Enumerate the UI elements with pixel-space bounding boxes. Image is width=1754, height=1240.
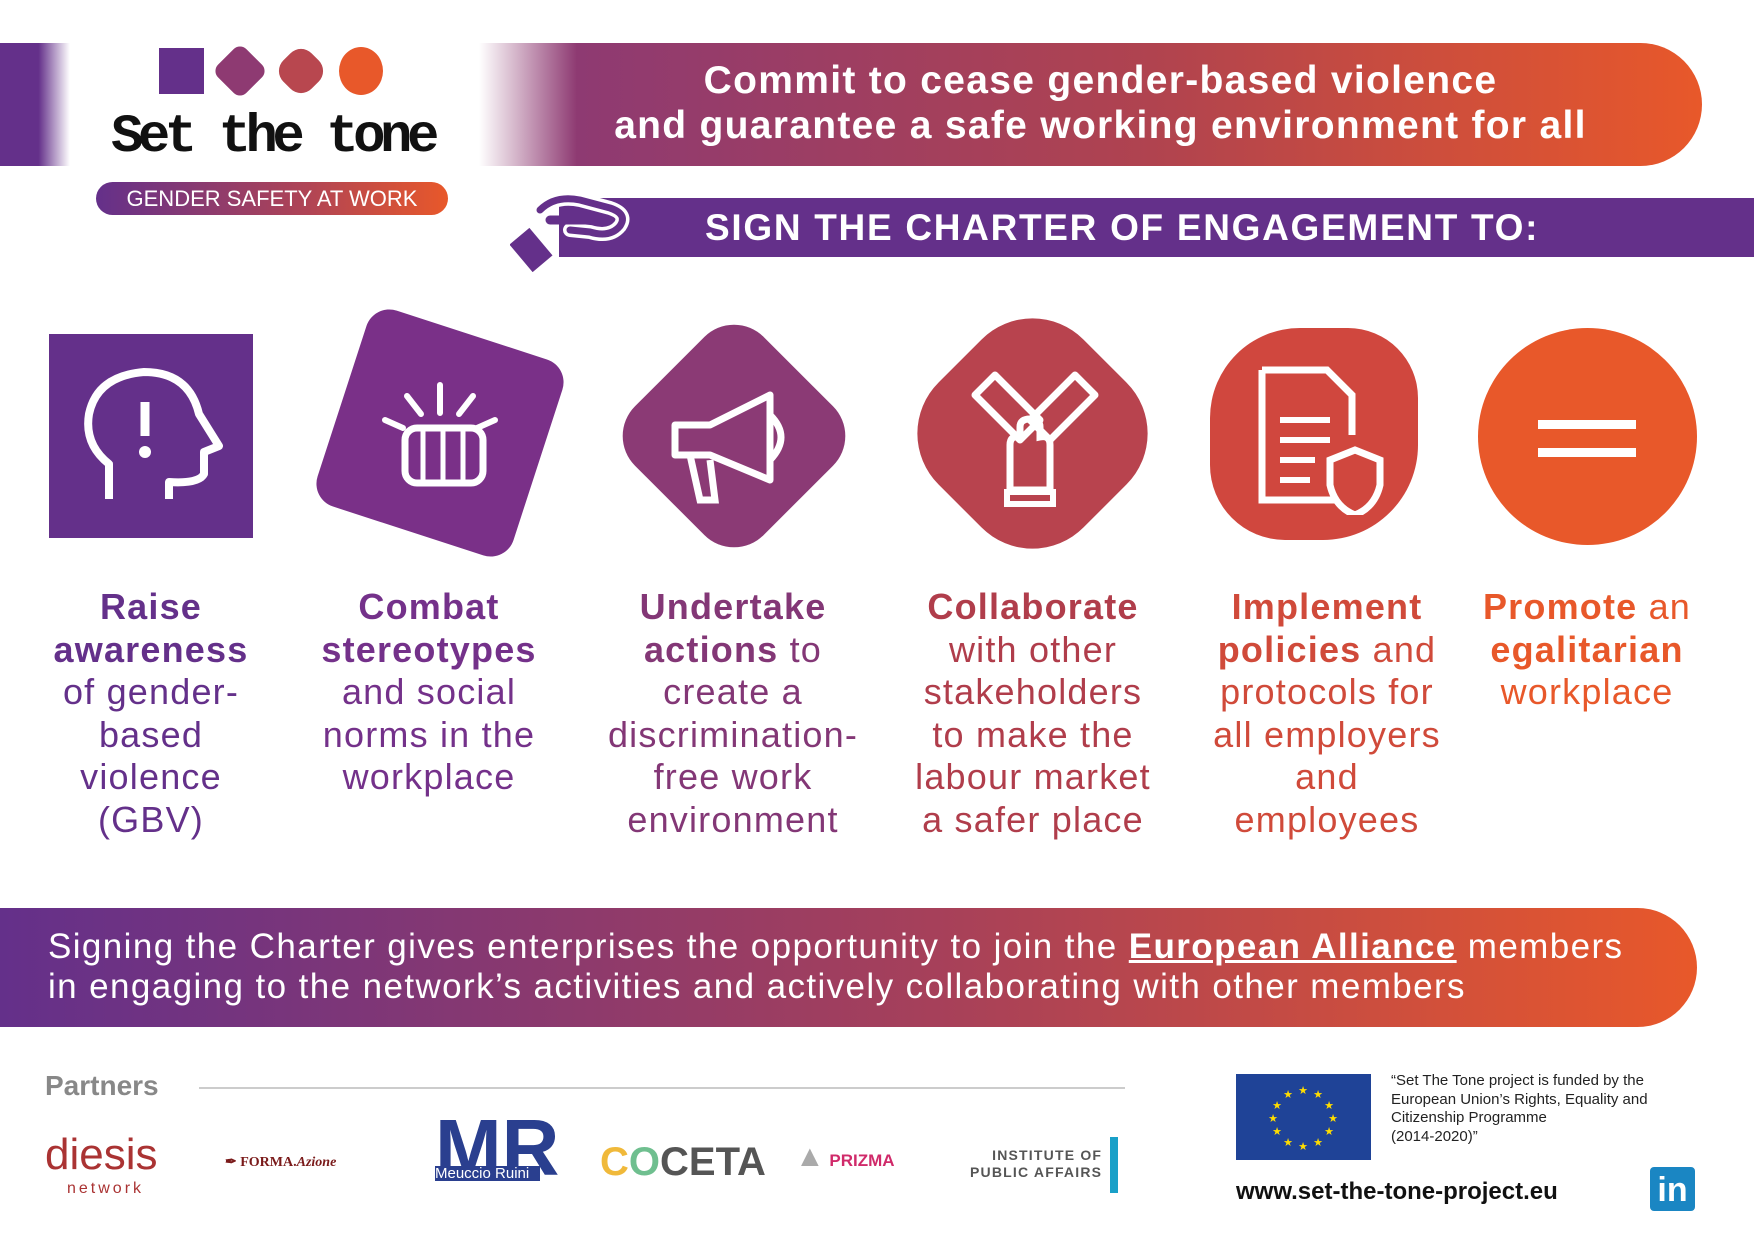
EU flag: ★ <box>1272 1126 1282 1138</box>
funding text: Citizenship Programme <box>1391 1109 1547 1126</box>
text: implement: all employers <box>1213 714 1441 754</box>
icon 4: hands <box>888 289 1177 578</box>
text: undertake actions: Undertake <box>640 586 826 627</box>
text: raise awareness: (GBV) <box>98 798 204 840</box>
EU flag: ★ <box>1328 1113 1338 1125</box>
top banner: and guarantee a safe working environment for all <box>614 104 1587 147</box>
text: collaborate: a safer place <box>922 798 1144 840</box>
EU flag: ★ <box>1268 1113 1278 1125</box>
funding text: (2014-2020)” <box>1391 1128 1478 1144</box>
text: combat stereotypes: workplace <box>343 756 515 797</box>
text: combat stereotypes: and social <box>342 671 516 712</box>
top banner <box>479 43 1702 166</box>
text: raise awareness: of gender- <box>63 671 239 712</box>
icon 6: equals <box>1478 328 1697 545</box>
bottom banner: in engaging to the network’s activities and actively collaborating with other members <box>48 967 1466 1006</box>
text: raise awareness: violence <box>80 756 222 797</box>
logo: coceta: COCETA <box>600 1140 766 1184</box>
text: implement: employees <box>1235 798 1419 840</box>
EU flag: ★ <box>1283 1137 1293 1149</box>
EU flag: ★ <box>1298 1085 1308 1097</box>
text: undertake actions <box>608 586 858 840</box>
funding text <box>1391 1072 1648 1144</box>
left purple bar <box>0 43 70 166</box>
EU flag: ★ <box>1272 1100 1282 1112</box>
EU flag: ★ <box>1283 1089 1293 1101</box>
text: collaborate: labour market <box>915 756 1151 797</box>
text: implement: Implement <box>1232 586 1422 627</box>
EU flag: ★ <box>1313 1089 1323 1101</box>
bottom banner: Signing the Charter gives enterprises the opportunity to join the European Alliance members <box>48 927 1623 966</box>
logo: prizma: ▲ PRIZMA <box>795 1140 895 1173</box>
icon: linkedin: in <box>1657 1171 1688 1209</box>
partner logos <box>45 1103 1118 1197</box>
bottom banner <box>0 908 1697 1027</box>
icon 5: document <box>1210 328 1418 540</box>
text: collaborate: stakeholders <box>924 671 1142 712</box>
text: collaborate: with other <box>949 628 1117 670</box>
EU flag: ★ <box>1298 1141 1308 1153</box>
icon: linkedin <box>1650 1167 1695 1211</box>
text: raise awareness: Raise <box>100 586 202 627</box>
EU flag: ★ <box>1324 1100 1334 1112</box>
text: implement: and <box>1295 756 1359 797</box>
text: promote: Promote an <box>1483 586 1691 627</box>
funding text: European Union’s Rights, Equality and <box>1391 1090 1648 1108</box>
text: implement <box>1213 586 1441 840</box>
logo: meuccio ruini: MR <box>435 1103 559 1192</box>
text: promote <box>1483 586 1691 712</box>
logo title: Set the tone <box>111 107 434 168</box>
logo shapes <box>159 46 383 96</box>
icon 1: head <box>49 334 253 538</box>
logo: institute of public affairs: INSTITUTE OF <box>992 1147 1102 1163</box>
text: raise awareness: based <box>99 714 203 754</box>
text: combat stereotypes <box>321 586 537 797</box>
icon 3: megaphone <box>605 307 863 565</box>
EU flag: ★ <box>1313 1137 1323 1149</box>
logo: institute of public affairs <box>970 1147 1102 1180</box>
partner logos: network <box>67 1180 144 1197</box>
logo: meuccio ruini: Meuccio Ruini <box>435 1165 529 1182</box>
website: www.set-the-tone-project.eu <box>1236 1178 1558 1205</box>
text: combat stereotypes: norms in the <box>323 714 535 754</box>
text: promote: workplace <box>1501 671 1673 712</box>
text: undertake actions: create a <box>663 671 803 712</box>
subtitle pill <box>96 182 448 215</box>
charter bar: SIGN THE CHARTER OF ENGAGEMENT TO: <box>705 207 1539 248</box>
funding text: “Set The Tone project is funded by the <box>1391 1072 1644 1089</box>
text: undertake actions: actions to <box>644 628 822 670</box>
EU flag <box>1236 1074 1371 1160</box>
subtitle pill: GENDER SAFETY AT WORK <box>127 186 417 211</box>
text: combat stereotypes: Combat <box>358 586 500 627</box>
text: implement: policies and <box>1218 628 1436 670</box>
text: combat stereotypes: stereotypes <box>321 628 537 670</box>
partners heading: Partners <box>45 1070 159 1101</box>
logo: forma: ✒ FORMA.Azione <box>225 1155 336 1170</box>
text: undertake actions: free work <box>654 756 812 797</box>
text: raise awareness <box>54 586 248 840</box>
EU flag: ★ <box>1324 1126 1334 1138</box>
logo: institute of public affairs: PUBLIC AFFAIRS <box>970 1164 1102 1180</box>
text: implement: protocols for <box>1220 671 1434 712</box>
logo: diesis: diesis <box>45 1130 158 1179</box>
text: promote: egalitarian <box>1490 628 1684 670</box>
icon: handshake <box>510 195 630 272</box>
text: undertake actions: discrimination- <box>608 714 858 754</box>
text: collaborate <box>915 586 1151 840</box>
text: collaborate: Collaborate <box>927 586 1139 627</box>
text: undertake actions: environment <box>627 798 839 840</box>
text: collaborate: to make the <box>932 714 1134 754</box>
charter bar <box>559 198 1754 257</box>
icon 2: fist <box>310 303 570 563</box>
logo <box>96 46 448 215</box>
text: raise awareness: awareness <box>54 628 248 670</box>
top banner: Commit to cease gender-based violence <box>704 59 1497 102</box>
